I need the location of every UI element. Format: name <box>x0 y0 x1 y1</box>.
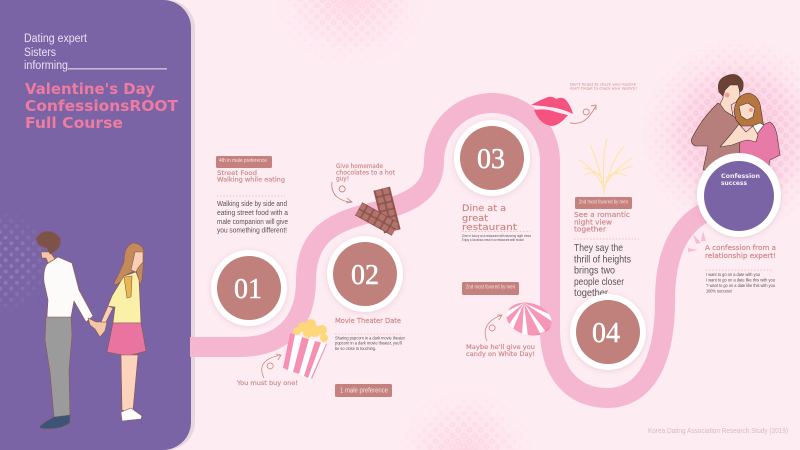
man neck and face <box>720 84 740 116</box>
candy note: Maybe he'll give you <box>466 344 535 351</box>
header text <box>24 33 167 72</box>
chocolate note: Give homemade <box>336 163 383 170</box>
source note: Korea Dating Association Research Study (2019) <box>648 428 788 435</box>
circle 04: 04 <box>592 318 620 349</box>
woman neck <box>131 252 143 272</box>
candy note <box>466 344 535 358</box>
icon: lips <box>531 97 573 126</box>
arrow: chocolate <box>332 182 352 203</box>
man shirt <box>44 257 93 322</box>
confession body: I want to go on a date like this with you <box>706 278 775 284</box>
step 1 body: Walking side by side and <box>217 199 287 208</box>
heart hands <box>720 124 758 147</box>
step 1 tag: 4th in male preference <box>219 158 267 164</box>
lipstick note: Don't forget to check your lipstick <box>570 82 637 86</box>
step 3 heading: great <box>462 214 489 224</box>
man hair <box>718 74 743 96</box>
man neck <box>41 252 55 263</box>
woman hair <box>114 243 144 285</box>
confession body <box>706 270 775 294</box>
chocolate note <box>336 163 396 182</box>
confession heading: A confession from a <box>705 243 776 252</box>
woman blouse <box>108 272 141 323</box>
circle 03 <box>454 120 530 196</box>
woman shoes <box>121 408 142 421</box>
step 2 body: popcorn in a dark movie theater, you'll <box>335 340 402 346</box>
illustration: couple holding hands <box>36 231 146 429</box>
man trousers <box>45 316 72 417</box>
step 4 tag <box>575 197 632 209</box>
icon: fireworks <box>579 138 633 195</box>
step 1 body <box>217 196 289 234</box>
step 3 body <box>462 232 531 242</box>
step 4 heading: together <box>574 224 607 234</box>
step 2 body <box>335 334 405 351</box>
arrow: popcorn <box>262 354 281 378</box>
illustration: couple with heart hands <box>691 74 780 170</box>
step 1 heading: Street Food <box>217 169 257 177</box>
step 1 heading <box>217 169 285 184</box>
circle: confession success: success <box>721 180 747 187</box>
lipstick note <box>570 82 637 90</box>
lipstick note: don't forget to check your lipstick! <box>570 86 637 90</box>
step 4 heading <box>574 210 630 234</box>
step 4 body <box>574 239 639 299</box>
step 1 body: male companion will give <box>217 217 288 226</box>
title: ConfessionsROOT <box>25 97 178 115</box>
woman legs <box>121 355 138 412</box>
title: Valentine's Day <box>25 80 155 98</box>
step 3 body: Enjoy a luxurious meal in a restaurant with music! <box>462 238 524 242</box>
step 3 body: Dine in luxury at a restaurant with stunning night views <box>462 234 531 238</box>
step 4 body: brings two <box>574 264 615 276</box>
man hair <box>36 231 60 254</box>
road <box>190 103 740 398</box>
step 2 tag: 1 male preference <box>340 388 388 394</box>
step 2 heading: Movie Theater Date <box>335 317 401 325</box>
step 1 body: eating street food with a <box>217 208 289 217</box>
circle 02: 02 <box>351 260 379 291</box>
header text: informing <box>24 60 68 72</box>
circle 01: 01 <box>234 274 262 305</box>
step 2 tag <box>335 384 392 397</box>
step 1 body: you something different! <box>217 226 287 234</box>
step 4 body: together <box>574 287 608 299</box>
circle 02 <box>327 236 403 312</box>
header text: Sisters <box>24 47 56 59</box>
confession body: I want to go on a date with you <box>706 272 760 278</box>
step 4 body: people closer <box>574 276 624 288</box>
step 1 heading: Walking while eating <box>217 176 285 184</box>
step 2 body: be so close to touching. <box>335 346 376 351</box>
step 3 heading <box>462 204 518 233</box>
arrow: candy <box>485 315 502 341</box>
step 3 tag: 2nd most favored by men <box>466 284 515 290</box>
popcorn note: You must buy one! <box>236 379 298 387</box>
circle: confession success: Confession <box>721 173 760 180</box>
man blush <box>725 93 729 97</box>
confession heading: relationship expert! <box>705 251 776 260</box>
icon: popcorn <box>283 319 328 379</box>
side panel <box>0 0 195 450</box>
step 2 body: Sharing popcorn in a dark movie theater <box>335 336 405 340</box>
step 3 tag <box>462 282 519 295</box>
step 4 body: thrill of heights <box>574 254 631 266</box>
woman ribbon <box>124 276 132 298</box>
circle 04 <box>570 294 646 370</box>
woman top <box>739 122 780 170</box>
chocolate note: chocolates to a hot <box>336 170 396 176</box>
woman hair <box>734 93 764 128</box>
title <box>25 80 178 132</box>
step 4 body: They say the <box>574 242 623 254</box>
woman face <box>739 103 755 120</box>
icon: candy <box>506 302 552 336</box>
woman blush <box>749 108 753 112</box>
woman collar <box>752 123 764 134</box>
step 3 heading: Dine at a <box>462 204 506 214</box>
candy note: candy on White Day! <box>466 351 535 358</box>
man shoes <box>40 415 70 429</box>
icon: burst <box>688 231 706 252</box>
chocolate note: guy! <box>336 176 349 182</box>
arrow: lips <box>570 105 596 123</box>
header text: Dating expert <box>24 33 88 45</box>
circle 01 <box>211 250 287 326</box>
woman arm <box>101 306 113 322</box>
hands <box>88 318 107 337</box>
step 4 tag: 2nd most favored by men <box>579 200 628 206</box>
step 4 heading: See a romantic <box>574 210 630 219</box>
step 3 heading: restaurant <box>462 223 518 233</box>
confession heading <box>705 243 776 260</box>
circle: confession success <box>697 153 781 237</box>
man shirt <box>691 103 741 170</box>
confession body: "I want to go on a date like this with you <box>706 283 775 289</box>
confession body: 100% success! <box>706 288 732 294</box>
step 4 heading: night view <box>574 218 612 226</box>
circle 03: 03 <box>477 144 505 175</box>
step 1 tag <box>216 156 272 168</box>
halftone: top centre <box>293 0 408 50</box>
woman skirt <box>107 323 146 356</box>
halftone: bottom centre <box>417 406 516 450</box>
halftone: panel <box>0 220 42 302</box>
title: Full Course <box>25 114 123 132</box>
icon: chocolate <box>355 187 401 236</box>
halftone: top right <box>650 50 800 210</box>
